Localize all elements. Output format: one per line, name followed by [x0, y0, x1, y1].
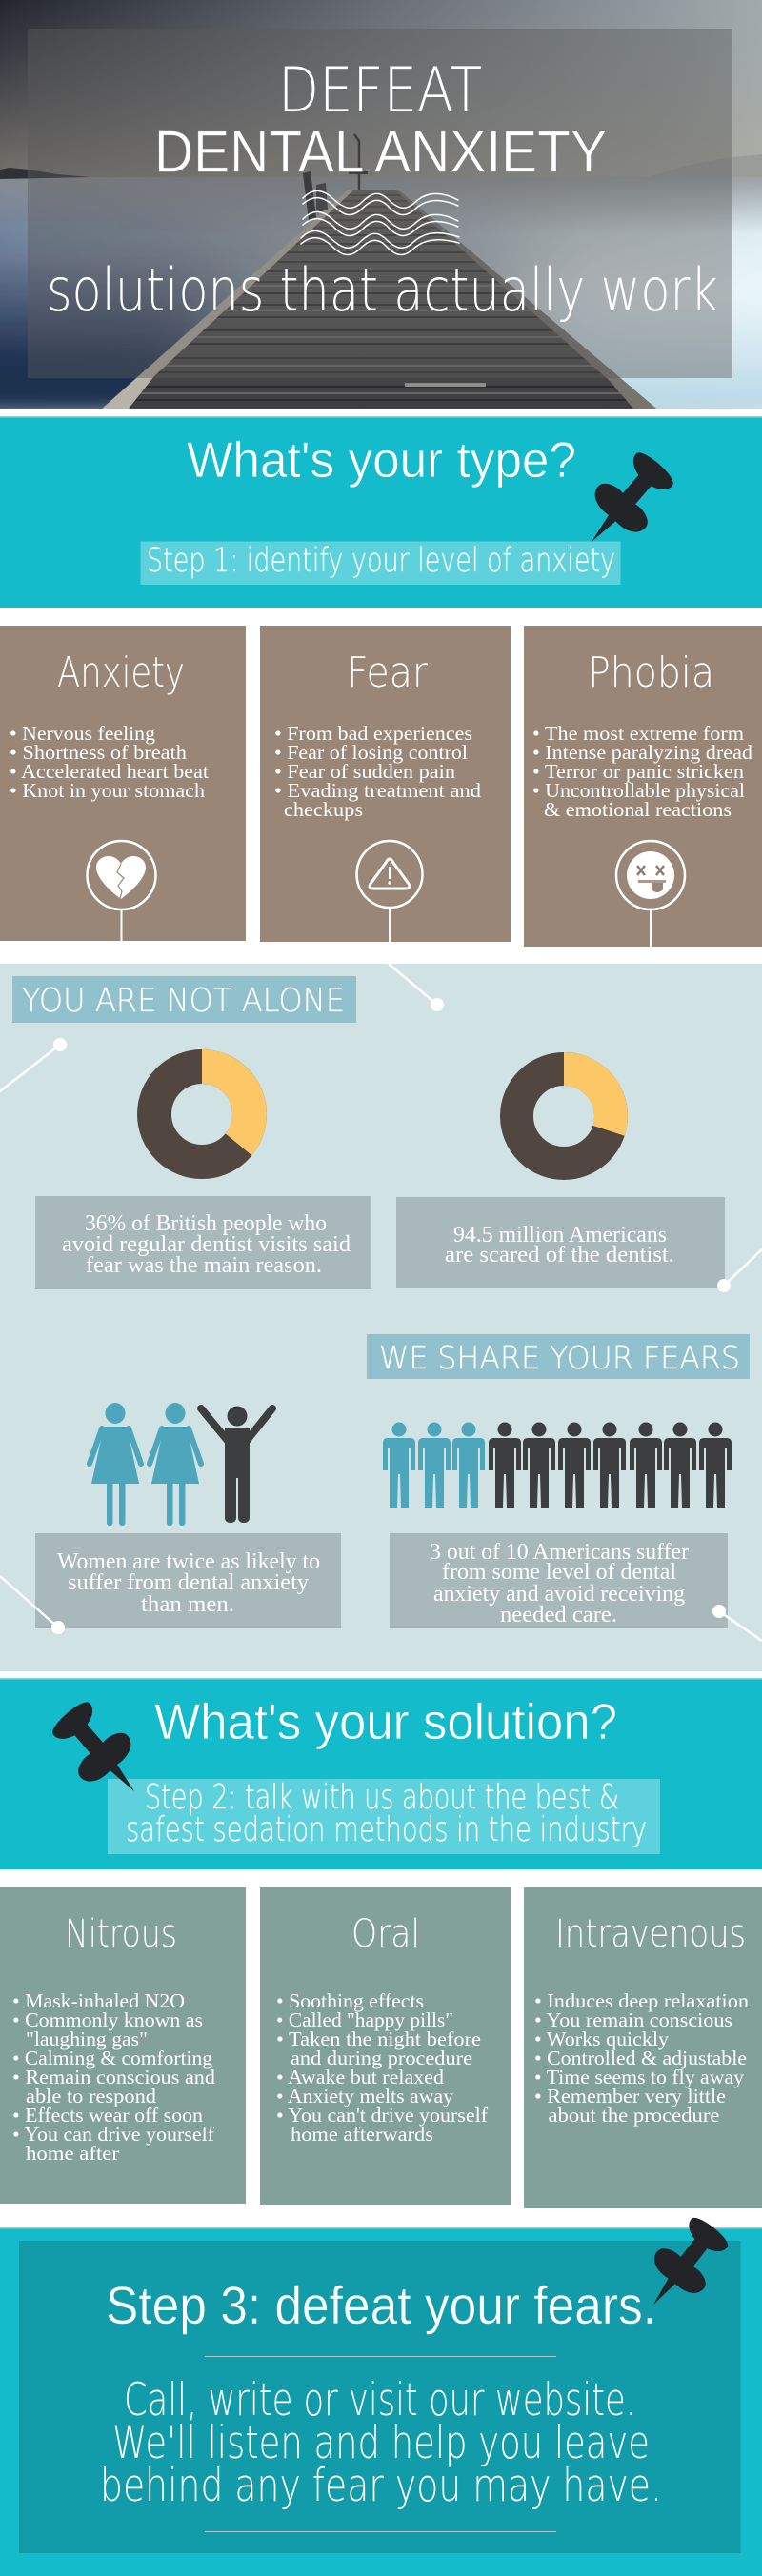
panel: statistics background	[0, 964, 762, 1671]
hero translucent panel	[28, 29, 732, 378]
oral list: • Awake but relaxed	[276, 2066, 445, 2088]
callout: British statistic	[35, 1196, 371, 1289]
callout: British statistic: avoid regular dentist visits said	[62, 1232, 351, 1257]
icon: push pin	[630, 2209, 737, 2323]
anxiety symptoms list	[10, 722, 209, 802]
phobia symptoms list	[532, 722, 753, 821]
panel: oral: Oral	[351, 1912, 420, 1956]
callout: 3 out of 10 statistic: anxiety and avoid receiving	[433, 1582, 685, 1607]
panel: anxiety	[0, 626, 246, 941]
nitrous list: • Mask-inhaled N2O	[12, 1989, 185, 2012]
oral list: • Soothing effects	[276, 1989, 424, 2012]
panel: what's your solution	[0, 1678, 762, 1869]
oral list: • Called "happy pills"	[276, 2008, 453, 2031]
step 2 banner: Step 2: talk with us about the best &	[145, 1778, 619, 1817]
intravenous list: • Induces deep relaxation	[534, 1989, 750, 2012]
nitrous list: • You can drive yourself	[12, 2123, 214, 2146]
callout: 3 out of 10 statistic: 3 out of 10 Americans suffer	[430, 1540, 689, 1565]
fear symptoms list	[274, 722, 482, 821]
callout: women statistic: suffer from dental anxiety	[68, 1570, 309, 1595]
phobia symptoms list: • The most extreme form	[532, 722, 744, 745]
intravenous list: • Works quickly	[534, 2027, 670, 2050]
fear symptoms list: • Fear of sudden pain	[274, 760, 456, 783]
fear symptoms list: checkups	[284, 798, 363, 821]
donut chart: 30 percent	[516, 1052, 628, 1164]
connector: lower left	[0, 1576, 65, 1634]
heading: step 3: Step 3: defeat your fears.	[106, 2275, 656, 2335]
panel: nitrous	[0, 1887, 246, 2204]
callout: women statistic: Women are twice as likely to	[57, 1549, 320, 1574]
callout: British statistic: 36% of British people who	[85, 1211, 327, 1236]
anxiety symptoms list: • Shortness of breath	[10, 741, 188, 764]
nitrous list: • Remain conscious and	[12, 2066, 216, 2088]
panel: step 3	[0, 2209, 762, 2576]
icon: dizzy face	[616, 841, 685, 947]
phobia symptoms list: • Terror or panic stricken	[532, 760, 745, 783]
nitrous list: • Calming & comforting	[12, 2047, 213, 2069]
step 1 banner: Step 1: identify your level of anxiety	[147, 542, 615, 580]
intravenous list: • Remember very little	[534, 2085, 726, 2107]
icon: warning triangle	[356, 841, 423, 942]
hero title: DENTAL ANXIETY	[154, 120, 607, 185]
anxiety symptoms list: • Nervous feeling	[10, 722, 156, 745]
fear symptoms list: • Evading treatment and	[274, 779, 482, 802]
connector: upper left	[0, 1038, 67, 1091]
intravenous list: • You remain conscious	[534, 2008, 732, 2031]
intravenous list: • Controlled & adjustable	[534, 2047, 747, 2069]
callout: British statistic: fear was the main reason.	[86, 1253, 322, 1278]
phobia symptoms list: & emotional reactions	[544, 798, 732, 821]
pictogram: 3 of 10 people highlighted	[383, 1423, 732, 1508]
nitrous list	[12, 1989, 216, 2165]
callout: 3 out of 10 statistic: needed care.	[500, 1603, 617, 1627]
callout: women statistic: than men.	[141, 1592, 234, 1617]
panel: phobia: Phobia	[588, 649, 714, 697]
icon: three waves	[301, 190, 459, 255]
panel: oral	[260, 1887, 511, 2205]
nitrous list: able to respond	[26, 2085, 157, 2107]
callout: 3 out of 10 statistic: from some level of dental	[442, 1560, 676, 1585]
nitrous list: home after	[26, 2142, 119, 2165]
oral list: • You can't drive yourself	[276, 2104, 488, 2127]
hero photo: pier over calm water	[0, 0, 762, 409]
hero title	[47, 55, 718, 325]
step 2 banner	[108, 1778, 660, 1854]
oral list: home afterwards	[291, 2123, 433, 2146]
heading: you are not alone: YOU ARE NOT ALONE	[22, 982, 345, 1020]
pictogram: two women and one man	[90, 1403, 272, 1526]
connector: right	[717, 1249, 762, 1292]
anxiety symptoms list: • Accelerated heart beat	[10, 760, 209, 783]
callout: American statistic: are scared of the dentist.	[445, 1243, 674, 1268]
panel: fear: Fear	[347, 649, 429, 697]
icon: push pin	[43, 1693, 158, 1812]
oral list: • Anxiety melts away	[276, 2085, 454, 2107]
intravenous list: • Time seems to fly away	[534, 2066, 745, 2088]
panel: phobia	[524, 626, 762, 947]
icon: teal person group	[383, 1423, 485, 1508]
icon: dark person group	[489, 1423, 732, 1508]
connector: lower right	[712, 1605, 762, 1641]
panel: anxiety: Anxiety	[57, 649, 185, 697]
icon: woman two	[150, 1403, 201, 1526]
callout: American statistic: 94.5 million Americans	[453, 1223, 667, 1248]
phobia symptoms list: • Uncontrollable physical	[532, 779, 745, 802]
step 1 banner	[141, 541, 621, 585]
icon: broken heart	[88, 841, 156, 941]
fear symptoms list: • Fear of losing control	[274, 741, 468, 764]
intravenous list	[534, 1989, 750, 2127]
nitrous list: • Effects wear off soon	[12, 2104, 204, 2127]
panel: fear	[260, 626, 511, 942]
panel: nitrous: Nitrous	[65, 1912, 177, 1956]
anxiety symptoms list: • Knot in your stomach	[10, 779, 206, 802]
oral list	[276, 1989, 488, 2146]
icon: woman one	[90, 1403, 141, 1526]
connector: top centre	[389, 964, 444, 1011]
oral list: and during procedure	[291, 2047, 472, 2069]
hero title: DEFEAT	[278, 55, 482, 127]
intravenous list: about the procedure	[549, 2104, 720, 2127]
heading: what's your type: What's your type?	[187, 432, 576, 489]
panel: what's your type	[0, 416, 762, 608]
panel: intravenous	[524, 1887, 762, 2208]
callout: American statistic	[396, 1197, 725, 1288]
nitrous list: • Commonly known as	[12, 2008, 203, 2031]
donut chart: 36 percent	[154, 1049, 267, 1162]
call to action text	[100, 2374, 662, 2512]
heading: what's your solution: What's your solution?	[154, 1694, 617, 1750]
callout: women statistic	[35, 1533, 341, 1628]
nitrous list: "laughing gas"	[26, 2027, 148, 2050]
oral list: • Taken the night before	[276, 2027, 481, 2050]
icon: man with raised arms	[201, 1406, 272, 1523]
heading: we share your fears: WE SHARE YOUR FEARS	[379, 1339, 740, 1376]
callout: 3 out of 10 statistic	[390, 1533, 728, 1628]
fear symptoms list: • From bad experiences	[274, 722, 472, 745]
icon: push pin	[568, 444, 683, 563]
phobia symptoms list: • Intense paralyzing dread	[532, 741, 753, 764]
